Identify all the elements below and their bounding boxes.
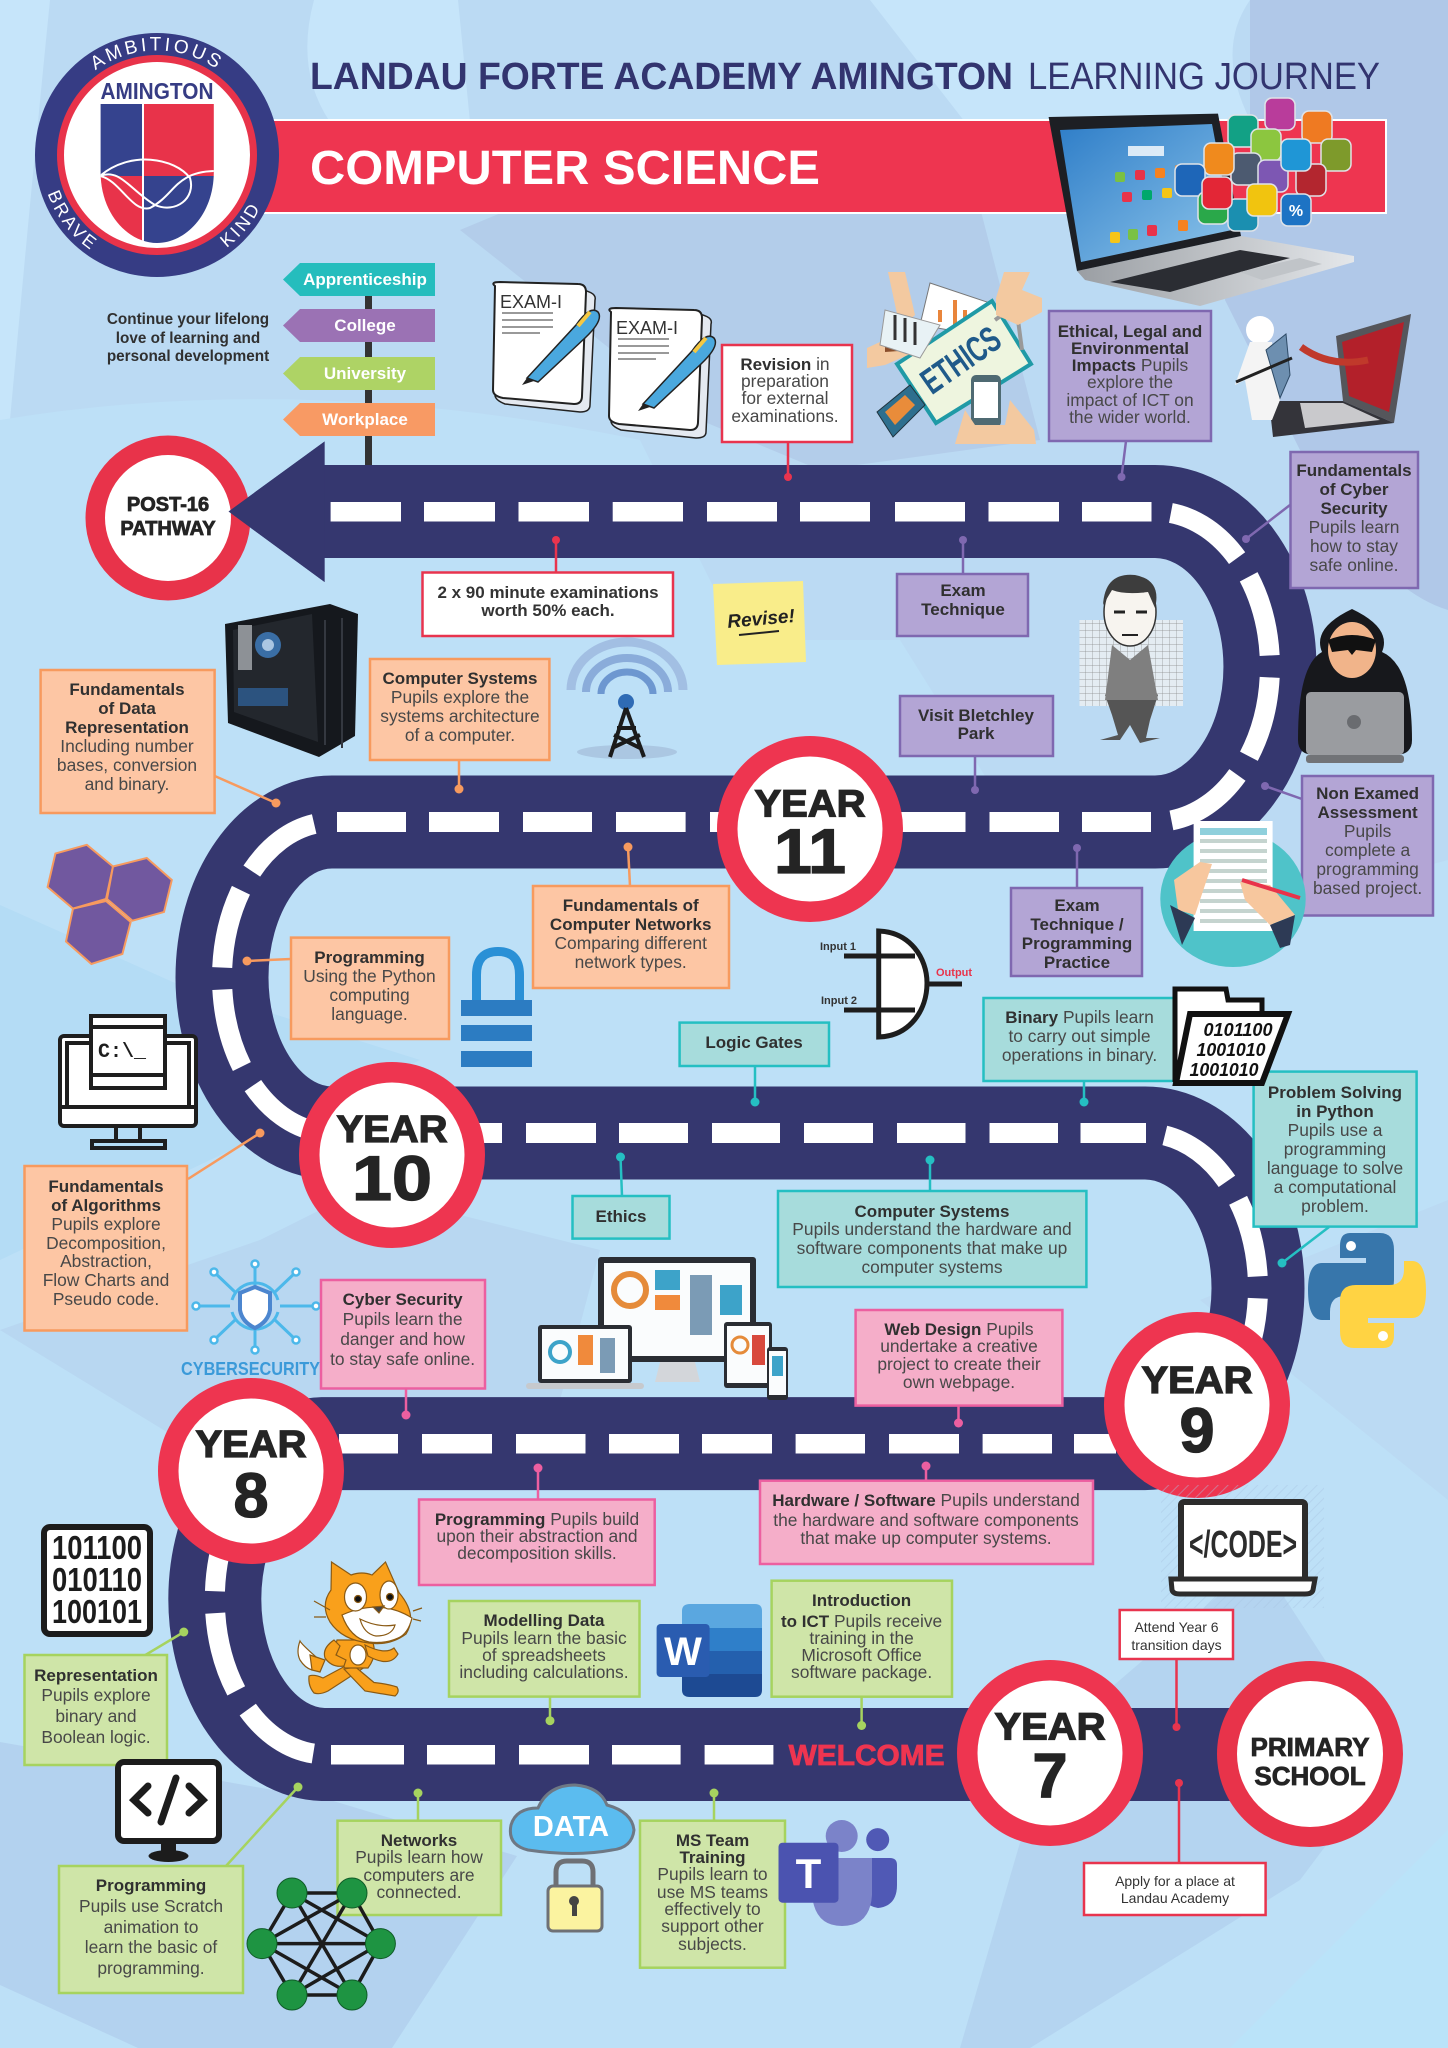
sticky note: Revise! [713, 581, 806, 665]
callout: Hardware / Software: the hardware and software components [773, 1510, 1079, 1530]
callout: exam format: 2 x 90 minute examinations [437, 583, 659, 602]
callout: Revision: Revision [740, 355, 811, 374]
callout: Networks [338, 1788, 501, 1915]
icon: binary padlock [461, 952, 532, 1067]
callout: Fundamentals of Computer Networks: Computer Networks [550, 915, 711, 934]
callout: Binary: to carry out simple [1008, 1026, 1151, 1046]
callout: Fundamentals of Algorithms: of Algorithms [51, 1196, 161, 1215]
callout: Web Design: Web Design [884, 1320, 981, 1339]
callout: Exam Technique [897, 536, 1028, 636]
callout: Fundamentals of Computer Networks: network types. [575, 952, 687, 972]
callout: MS Team Training: Pupils learn to [657, 1864, 768, 1884]
callout: Fundamentals of Algorithms: Pupils explore [51, 1214, 161, 1234]
callout: MS Team Training: support other [661, 1916, 764, 1936]
sign: Workplace [283, 403, 435, 436]
callout: Fundamentals of Data Representation: Including number [60, 736, 194, 756]
icon: code monitor [118, 1762, 219, 1862]
callout: Hardware / Software: that make up computer systems. [800, 1528, 1052, 1548]
icon: data cloud and padlock [510, 1785, 634, 1931]
sign: College: College [334, 316, 396, 335]
callout: Non Examed Assessment: Pupils [1344, 821, 1392, 841]
callout: Cyber Security: danger and how [340, 1329, 465, 1349]
callout: Fundamentals of Computer Networks: Fundamentals of [563, 896, 699, 915]
callout: Programming (Year 8) [419, 1464, 655, 1585]
road [215, 442, 1310, 1764]
marker: Year 10: YEAR [336, 1109, 448, 1151]
callout: Exam Technique / Programming Practice: Practice [1044, 953, 1110, 972]
logo: Amington school crest: KIND [220, 205, 258, 248]
callout: MS Team Training: subjects. [678, 1934, 747, 1954]
callout: Modelling Data: of spreadsheets [482, 1645, 606, 1665]
callout: Computer Systems (Year 11): of a computer. [405, 725, 515, 745]
icon: AND logic gate: Input 1 [820, 941, 856, 953]
callout: Non Examed Assessment: based project. [1313, 878, 1422, 898]
icon: Microsoft Teams: T [796, 1850, 822, 1897]
callout: Fundamentals of Data Representation: and binary. [85, 774, 169, 794]
callout: Computer Systems (Year 9): computer systems [861, 1257, 1003, 1277]
callout: Introduction to ICT: Introduction [812, 1591, 911, 1610]
marker: Primary School: SCHOOL [1254, 1761, 1366, 1791]
callout: Representation: Representation [34, 1666, 158, 1685]
marker: Year 7: 7 [1032, 1742, 1068, 1812]
callout: Visit Bletchley Park: Park [958, 724, 995, 743]
callout: Exam Technique / Programming Practice: Technique / [1030, 915, 1124, 934]
callout: Problem Solving in Python: Pupils use a [1288, 1120, 1383, 1140]
callout: Computer Systems (Year 11): systems architecture [380, 706, 540, 726]
callout: Problem Solving in Python: a computational [1274, 1177, 1396, 1197]
sign: University: University [324, 364, 407, 383]
marker: Post-16 Pathway: PATHWAY [120, 518, 216, 540]
logo: Amington school crest: BRAVE [48, 190, 97, 250]
icon: binary folder: 0101100 [1204, 1020, 1272, 1040]
callout: Non Examed Assessment: complete a [1325, 840, 1410, 860]
icon: wireless tower [571, 642, 683, 759]
callout: Binary: operations in binary. [1002, 1045, 1157, 1065]
icon: binary digits box: 101100 [52, 1529, 142, 1566]
callout: Non Examed Assessment [1261, 776, 1433, 916]
callout: Ethical, Legal and Environmental Impacts: the wider world. [1069, 407, 1191, 427]
callout: Problem Solving in Python: in Python [1296, 1102, 1374, 1121]
text: lifelong learning message: personal development [107, 348, 269, 365]
callout: Fundamentals of Data Representation [41, 670, 280, 813]
marker: Year 9: 9 [1179, 1396, 1215, 1466]
signpost: post-16 destinations [283, 263, 435, 471]
marker: Year 10: 10 [352, 1144, 432, 1214]
callout: Programming (Scratch) [59, 1782, 302, 1993]
logo: Amington school crest [35, 33, 279, 277]
illustration: Alan Turing caricature [1080, 575, 1183, 743]
callout: Ethical, Legal and Environmental Impacts: Impacts [1072, 356, 1136, 375]
callout: Representation: Pupils explore [41, 1685, 151, 1705]
callout: Hardware / Software [760, 1462, 1093, 1564]
image: figure defending laptop from cyber attack [1235, 314, 1411, 437]
callout: Introduction to ICT: training in the [809, 1628, 914, 1648]
sign: Apprenticeship [283, 263, 435, 296]
icon: exam papers with pens [493, 282, 715, 438]
icon: binary digits box [44, 1527, 150, 1634]
callout: Programming (Year 8): Pupils build [545, 1509, 639, 1529]
app icon cluster [1175, 98, 1351, 231]
callout: Cyber Security: Cyber Security [343, 1290, 463, 1309]
callout: Introduction to ICT: to ICT [781, 1612, 830, 1631]
marker: Year 9: YEAR [1142, 1360, 1252, 1402]
callout: Revision: in [811, 354, 830, 374]
callout: Fundamentals of Cyber Security [1242, 452, 1418, 588]
callout: Hardware / Software: Pupils understand [936, 1490, 1080, 1510]
callout: exam format: worth 50% each. [480, 601, 615, 620]
icon: Scratch cat [298, 1562, 422, 1696]
callout: Problem Solving in Python: language to solve [1267, 1158, 1403, 1178]
callout: Web Design: undertake a creative [880, 1336, 1038, 1356]
callout: Networks: computers are [363, 1865, 475, 1885]
callout: Computer Systems (Year 11): Computer Systems [383, 669, 537, 688]
callout: Computer Systems (Year 9): Computer Systems [855, 1202, 1009, 1221]
callout: Modelling Data: Modelling Data [484, 1611, 605, 1630]
icon: code laptop [1161, 1485, 1324, 1608]
callout: Programming (Year 8): decomposition skills. [457, 1543, 617, 1563]
icon: binary folder [1175, 989, 1288, 1083]
callout: MS Team Training: Training [679, 1848, 746, 1867]
callout: Attend Year 6 transition days [1120, 1610, 1233, 1731]
marker: Year 9 [1104, 1312, 1290, 1498]
image: laptop with app icons: % [1289, 203, 1303, 220]
icon: binary digits box: 010110 [52, 1561, 142, 1598]
marker: Post-16 Pathway: POST-16 [127, 494, 209, 516]
callout: Modelling Data [449, 1601, 640, 1725]
marker: Year 11: 11 [774, 817, 846, 887]
callout: Apply for a place: Landau Academy [1121, 1890, 1229, 1906]
callout: Apply for a place: Apply for a place at [1115, 1873, 1235, 1889]
banner: Computer Science [240, 120, 1386, 213]
callout: Programming (Scratch): animation to [104, 1917, 198, 1937]
marker: Primary School: PRIMARY [1251, 1732, 1369, 1762]
illustration: hands writing on document [1160, 821, 1306, 967]
callout: Binary: Pupils learn [1058, 1007, 1154, 1027]
callout: Web Design [856, 1310, 1062, 1428]
callout: Revision: examinations. [731, 406, 839, 426]
title: Landau Forte Academy Amington Learning Journey [310, 56, 1380, 98]
callout: Fundamentals of Data Representation: of Data [98, 699, 156, 718]
callout: Exam Technique: Technique [921, 600, 1005, 619]
callout: Cyber Security: Pupils learn the [343, 1309, 463, 1329]
callout: exam format [422, 536, 673, 636]
icon: binary folder: 1001010 [1190, 1060, 1258, 1080]
sign: Apprenticeship: Apprenticeship [303, 270, 427, 289]
callout: Introduction to ICT: Microsoft Office [801, 1645, 922, 1665]
callout: Attend Year 6 transition days: Attend Year 6 [1134, 1619, 1219, 1635]
illustration: hacker at laptop [1298, 609, 1412, 763]
marker: Year 7: YEAR [994, 1706, 1106, 1748]
callout: Binary: Binary [1005, 1008, 1059, 1027]
icon: data cloud and padlock: DATA [533, 1811, 609, 1843]
callout: Fundamentals of Computer Networks [533, 842, 729, 988]
marker: Year 7 [957, 1660, 1143, 1846]
callout: MS Team Training: effectively to [664, 1899, 761, 1919]
callout: Introduction to ICT: software package. [791, 1662, 932, 1682]
callout: Exam Technique / Programming Practice: Exam [1054, 896, 1100, 915]
callout: Programming (Scratch): Pupils use Scratch [79, 1896, 223, 1916]
callout: Fundamentals of Cyber Security: of Cyber [1320, 480, 1389, 499]
logo: Amington school crest: AMBITIOUS [92, 37, 221, 70]
icon: AND logic gate: Input 2 [821, 995, 857, 1007]
callout: Fundamentals of Cyber Security: Fundamentals [1296, 461, 1412, 480]
callout: Non Examed Assessment: programming [1316, 859, 1419, 879]
callout: Modelling Data: Pupils learn the basic [461, 1628, 627, 1648]
icon: Microsoft Teams [778, 1820, 897, 1926]
callout: MS Team Training: MS Team [676, 1831, 749, 1850]
callout: Cyber Security: to stay safe online. [330, 1349, 475, 1369]
icon: exam papers with pens: EXAM-I [500, 292, 562, 312]
image: laptop with app icons [1049, 98, 1354, 306]
callout: Programming (Scratch): learn the basic of [85, 1937, 217, 1957]
callout: Modelling Data: including calculations. [459, 1662, 629, 1682]
callout: Ethical, Legal and Environmental Impacts [1049, 311, 1211, 481]
text: lifelong learning message: Continue your lifelong [107, 311, 269, 328]
callout: Hardware / Software: Hardware / Software [772, 1491, 936, 1510]
callout: Problem Solving in Python: problem. [1301, 1196, 1369, 1216]
text: lifelong learning message: love of learning and [116, 330, 260, 347]
callout: Programming (Python): computing [329, 985, 410, 1005]
callout: Visit Bletchley Park [900, 696, 1053, 794]
icon: AND logic gate [820, 931, 972, 1037]
callout: Fundamentals of Algorithms: Fundamentals [48, 1177, 164, 1196]
icon: exam papers with pens: EXAM-I [616, 318, 678, 338]
callout: Fundamentals of Cyber Security: Security [1320, 499, 1388, 518]
callout: Exam Technique / Programming Practice [1011, 844, 1142, 976]
image: ethics clipboard with hands [867, 272, 1042, 444]
icon: hexagons [48, 845, 172, 964]
callout: Fundamentals of Algorithms: Flow Charts and [43, 1270, 169, 1290]
marker: Post-16 Pathway [86, 436, 325, 600]
icon: Python logo [1308, 1233, 1426, 1348]
callout: Representation: binary and [55, 1706, 137, 1726]
icon: binary digits box: 100101 [52, 1593, 142, 1630]
callout: Representation: Boolean logic. [41, 1727, 151, 1747]
callout: Fundamentals of Cyber Security: safe online. [1310, 555, 1398, 575]
callout: Programming (Year 8): upon their abstraction and [436, 1526, 638, 1546]
sign: College [283, 309, 435, 342]
callout: Fundamentals of Algorithms: Pseudo code. [53, 1289, 159, 1309]
callout: Networks: Pupils learn how [355, 1847, 483, 1867]
callout: Visit Bletchley Park: Visit Bletchley [918, 706, 1034, 725]
icon: AND logic gate: Output [936, 967, 972, 979]
sign: University [283, 357, 435, 390]
road label: Welcome: WELCOME [789, 1740, 945, 1772]
callout: Logic Gates [680, 1023, 829, 1106]
icon: code laptop: </CODE> [1189, 1524, 1297, 1566]
callout: Fundamentals of Algorithms: Abstraction, [60, 1251, 152, 1271]
callout: Web Design: own webpage. [903, 1372, 1015, 1392]
callout: Ethics: Ethics [595, 1207, 647, 1226]
callout: Networks: connected. [376, 1882, 462, 1902]
callout: Ethical, Legal and Environmental Impacts: impact of ICT on [1066, 390, 1194, 410]
callout: Problem Solving in Python: programming [1284, 1139, 1386, 1159]
callout: Ethical, Legal and Environmental Impacts: Environmental [1071, 339, 1189, 358]
callout: MS Team Training [640, 1788, 785, 1968]
callout: Programming (Python) [242, 938, 449, 1039]
marker: Year 10 [299, 1062, 485, 1248]
sign: Workplace: Workplace [322, 410, 408, 429]
callout: Ethical, Legal and Environmental Impacts: explore the [1087, 372, 1173, 392]
callout: Programming (Python): Programming [314, 948, 425, 967]
callout: Fundamentals of Algorithms [24, 1128, 264, 1330]
callout: Fundamentals of Data Representation: Fundamentals [69, 680, 185, 699]
callout: Exam Technique: Exam [940, 581, 986, 600]
callout: Fundamentals of Data Representation: bases, conversion [57, 755, 197, 775]
callout: Revision: preparation [741, 371, 829, 391]
callout: Exam Technique / Programming Practice: Programming [1022, 934, 1132, 953]
callout: Binary [984, 998, 1174, 1106]
sticky note: Revise!: Revise! [727, 606, 796, 633]
icon: command prompt monitor [60, 1016, 196, 1148]
icon: Microsoft Word [657, 1604, 762, 1697]
icon: cybersecurity shield network: CYBERSECURITY [181, 1359, 320, 1379]
callout: Programming (Scratch): Programming [96, 1876, 206, 1895]
callout: Logic Gates: Logic Gates [705, 1033, 803, 1052]
image: responsive web devices [526, 1257, 788, 1400]
callout: Fundamentals of Cyber Security: Pupils learn [1309, 517, 1399, 537]
callout: MS Team Training: use MS teams [657, 1882, 768, 1902]
callout: Apply for a place [1084, 1779, 1266, 1915]
image: ethics clipboard with hands: ETHICS [913, 318, 1008, 402]
icon: computer tower [225, 604, 358, 757]
marker: Year 8 [158, 1378, 344, 1564]
callout: Introduction to ICT: Pupils receive [829, 1611, 942, 1631]
title: Landau Forte Academy Amington Learning Journey: LANDAU FORTE ACADEMY AMINGTON [310, 56, 1013, 98]
callout: Ethical, Legal and Environmental Impacts: Pupils [1136, 355, 1189, 375]
icon: Microsoft Word: W [664, 1630, 702, 1674]
callout: Fundamentals of Algorithms: Decomposition, [46, 1233, 166, 1253]
callout: Fundamentals of Cyber Security: how to stay [1310, 536, 1398, 556]
callout: Computer Systems (Year 9): Pupils understand the hardware and [792, 1219, 1072, 1239]
callout: Revision: for external [742, 388, 828, 408]
callout: Programming (Python): language. [331, 1004, 408, 1024]
callout: Attend Year 6 transition days: transition days [1131, 1637, 1222, 1653]
icon: network mesh [247, 1878, 395, 2010]
callout: Ethical, Legal and Environmental Impacts: Ethical, Legal and [1058, 322, 1202, 341]
callout: Fundamentals of Data Representation: Representation [65, 718, 189, 737]
logo: Amington school crest: AMINGTON [100, 78, 214, 104]
callout: Problem Solving in Python: Problem Solving [1268, 1083, 1402, 1102]
icon: cybersecurity shield network [181, 1260, 320, 1379]
marker: Year 8: YEAR [196, 1424, 306, 1466]
banner: Computer Science: COMPUTER SCIENCE [310, 142, 820, 195]
callout: Computer Systems (Year 11) [370, 659, 549, 794]
icon: binary folder: 1001010 [1196, 1040, 1266, 1060]
callout: Problem Solving in Python [1254, 1072, 1417, 1268]
callout: Computer Systems (Year 11): Pupils explore the [391, 687, 529, 707]
callout: Networks: Networks [381, 1831, 457, 1850]
callout: Introduction to ICT [772, 1581, 952, 1730]
signpost pole [365, 296, 372, 471]
callout: Computer Systems (Year 9): software components that make up [797, 1238, 1067, 1258]
marker: Primary School [1217, 1661, 1403, 1847]
icon: command prompt monitor: C:\_ [98, 1041, 147, 1064]
callout: Non Examed Assessment: Non Examed [1316, 784, 1419, 803]
callout: Cyber Security [321, 1280, 485, 1420]
callout: Programming (Year 8): Programming [435, 1510, 545, 1529]
callout: Revision [722, 345, 852, 481]
title: Landau Forte Academy Amington Learning Journey: LEARNING JOURNEY [1028, 56, 1380, 98]
callout: Web Design: project to create their [877, 1354, 1041, 1374]
marker: Year 11: YEAR [754, 784, 866, 826]
callout: Fundamentals of Computer Networks: Comparing different [554, 933, 707, 953]
marker: Year 11 [717, 736, 903, 922]
callout: Non Examed Assessment: Assessment [1318, 803, 1418, 822]
callout: Computer Systems (Year 9) [778, 1156, 1086, 1287]
callout: Programming (Scratch): programming. [97, 1958, 205, 1978]
callout: Representation [24, 1628, 188, 1765]
callout: Ethics [572, 1152, 670, 1239]
callout: Web Design: Pupils [981, 1319, 1034, 1339]
marker: Year 8: 8 [233, 1461, 269, 1531]
callout: Programming (Python): Using the Python [303, 966, 436, 986]
